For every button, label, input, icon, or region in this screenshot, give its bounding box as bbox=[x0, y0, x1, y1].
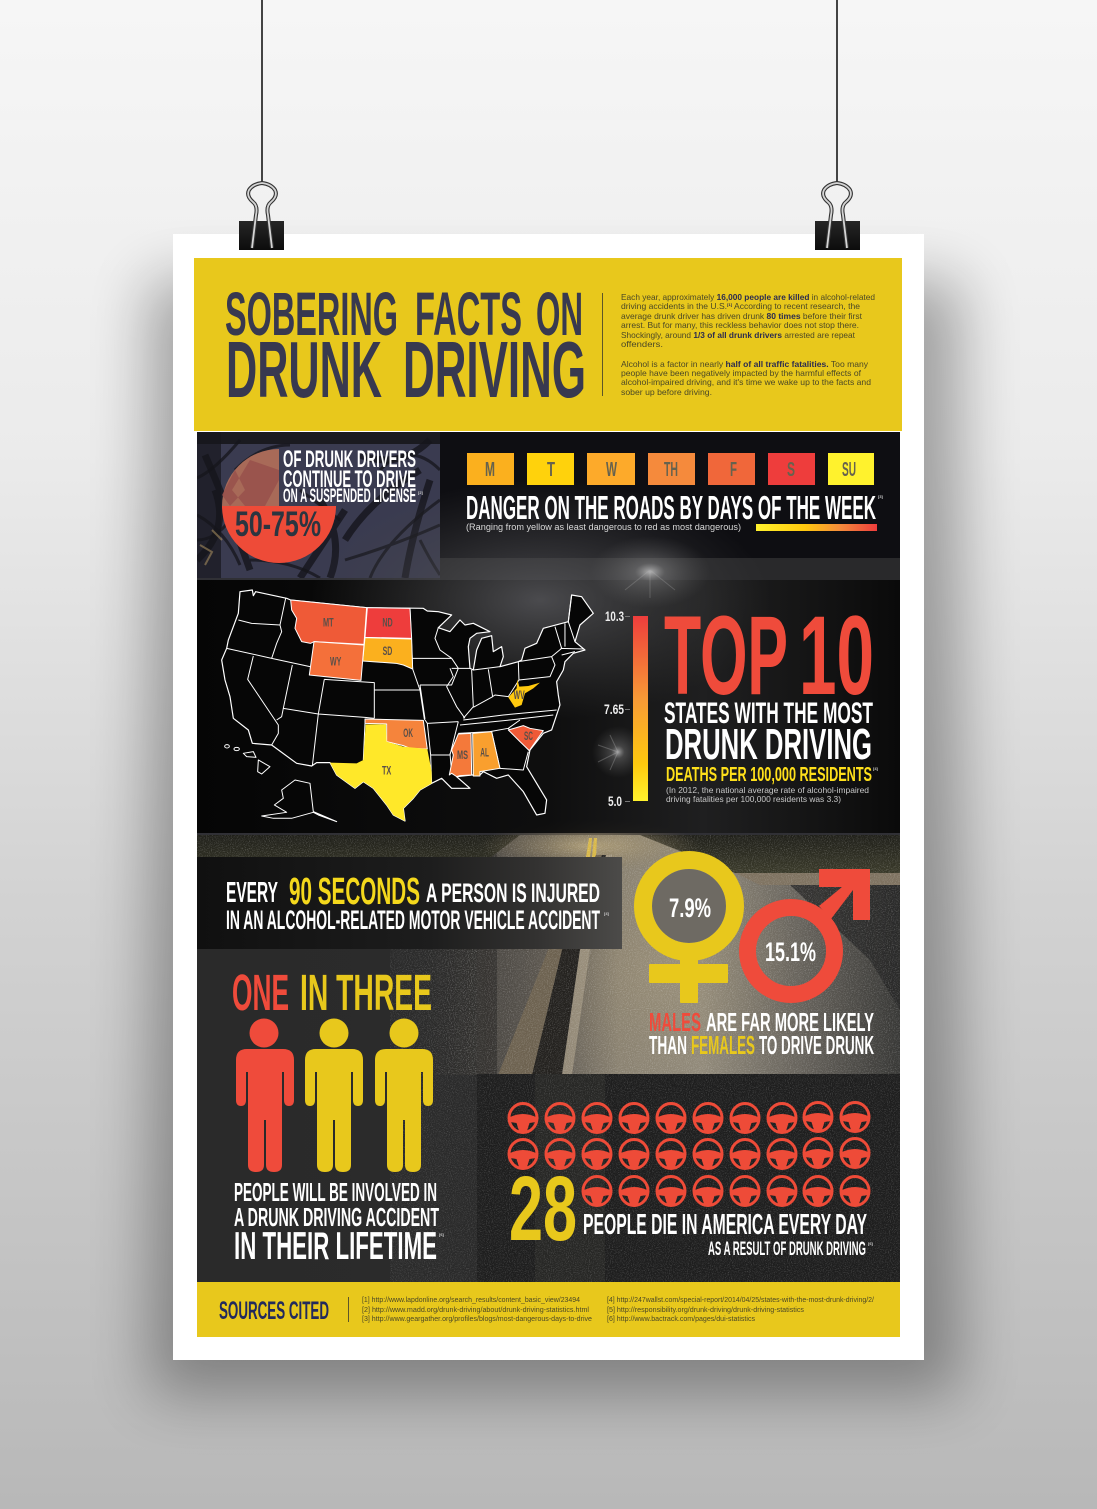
heading: one in three: IN THREE bbox=[300, 964, 432, 1021]
hanging strings bbox=[262, 0, 837, 184]
intro text: According to recent research, the bbox=[732, 301, 860, 311]
suspended license text: OF DRUNK DRIVERS bbox=[283, 446, 416, 473]
day letters: M bbox=[485, 459, 495, 481]
panel: every 90 seconds: A PERSON IS INJURED bbox=[426, 878, 600, 908]
sources list: [5] http://responsibility.org/drunk-driving/drunk-driving-statistics bbox=[607, 1307, 804, 1314]
panel: one in three bbox=[197, 949, 477, 1282]
state labels: WY bbox=[330, 656, 341, 669]
footer: sources bbox=[197, 1282, 900, 1337]
state: OK bbox=[365, 719, 427, 749]
icon: left binder clip bbox=[239, 183, 284, 250]
intro text: arrest. But for many, this reckless behavior does not stop there. bbox=[621, 320, 859, 330]
suspended license text: CONTINUE TO DRIVE bbox=[283, 466, 416, 493]
national average note bbox=[666, 785, 869, 804]
state: MT bbox=[291, 600, 367, 644]
map panel fog bbox=[310, 480, 770, 720]
day letters: SU bbox=[842, 459, 856, 481]
heading: top 10: 10 bbox=[799, 593, 874, 718]
heading: drunk driving: DRUNK DRIVING bbox=[665, 720, 872, 769]
pie value: 50-75% bbox=[235, 505, 321, 544]
sources list: [3] http://www.geargather.org/profiles/blogs/most-dangerous-days-to-drive bbox=[362, 1316, 592, 1323]
sources list: [2] http://www.madd.org/drunk-driving/about/drunk-driving-statistics.html bbox=[362, 1307, 589, 1314]
suspended license text: ON A SUSPENDED LICENSE bbox=[283, 486, 416, 507]
state: WV bbox=[508, 679, 540, 708]
heading: states with the most: STATES WITH THE MOST bbox=[664, 697, 873, 730]
state: SC bbox=[508, 726, 543, 751]
state: ND bbox=[365, 608, 412, 638]
state labels: AL bbox=[480, 747, 489, 760]
intro text: sober up before driving. bbox=[621, 387, 712, 397]
one in three caption: IN THEIR LIFETIME bbox=[234, 1225, 437, 1268]
day letters bbox=[485, 459, 856, 481]
state labels: SC bbox=[524, 730, 533, 743]
state labels: ND bbox=[382, 617, 393, 630]
day letters: T bbox=[547, 459, 555, 481]
day letters: F bbox=[730, 459, 737, 481]
danger gradient bar bbox=[756, 524, 877, 531]
caption: result of drunk driving bbox=[708, 1239, 874, 1260]
panel: 28 people die bbox=[477, 1074, 900, 1282]
scale legend: 7.65 bbox=[604, 701, 624, 717]
panel: every 90 seconds: IN AN ALCOHOL-RELATED MOTOR VEHICLE ACCIDENT bbox=[226, 905, 600, 935]
state: MS bbox=[449, 733, 472, 777]
heading: danger on the roads: [3] bbox=[878, 494, 884, 499]
intro text: average drunk driver has driven drunk 80 times before their first bbox=[621, 311, 863, 321]
headlight glow middle bbox=[592, 726, 644, 778]
state: Alaska bbox=[262, 780, 337, 822]
intro text: alcohol-impaired driving, and it's time we wake up to the facts and bbox=[621, 377, 871, 387]
males vs females text: FEMALES bbox=[691, 1030, 755, 1060]
sources list bbox=[362, 1297, 874, 1323]
female value: 7.9% bbox=[669, 893, 711, 923]
danger subtext: (Ranging from yellow as least dangerous to red as most dangerous) bbox=[466, 522, 741, 532]
males vs females text bbox=[649, 1007, 874, 1060]
intro text: people have been negatively impacted by the harmful effects of bbox=[621, 368, 862, 378]
panel: every 90 seconds: EVERY bbox=[226, 877, 278, 909]
icon: right binder clip bbox=[815, 183, 860, 250]
state labels: OK bbox=[403, 727, 413, 740]
sources heading: SOURCES CITED bbox=[219, 1297, 329, 1325]
title bbox=[225, 280, 586, 414]
title: DRIVING bbox=[403, 325, 586, 414]
intro text: driving accidents in the U.S. bbox=[621, 301, 724, 311]
panel: every 90 seconds: 90 SECONDS bbox=[289, 871, 420, 913]
lower 48 outline bbox=[222, 590, 593, 821]
state labels: SD bbox=[383, 645, 392, 658]
strip behind glow bbox=[440, 558, 900, 580]
photo background: night road bbox=[197, 432, 900, 1282]
heading: deaths per 100,000: DEATHS PER 100,000 RESIDENTS bbox=[666, 764, 872, 786]
national average note: (In 2012, the national average rate of alcohol-impaired bbox=[666, 785, 869, 795]
scale legend bbox=[604, 608, 648, 809]
heading: one in three: ONE bbox=[232, 964, 289, 1021]
intro text: offenders. bbox=[621, 339, 663, 349]
heading: deaths per 100,000: [4] bbox=[873, 766, 879, 771]
state: WY bbox=[309, 642, 364, 680]
heading: deaths per 100,000 bbox=[666, 764, 879, 786]
sources list: [1] http://www.lapdonline.org/search_results/content_basic_view/23494 bbox=[362, 1297, 580, 1304]
pie chart: 50-75% bbox=[222, 449, 336, 563]
suspended license text bbox=[283, 446, 424, 507]
heading: danger on the roads bbox=[466, 489, 884, 526]
panel: map background bbox=[197, 580, 900, 833]
state: Hawaii bbox=[225, 745, 270, 774]
state labels: MS bbox=[457, 749, 468, 762]
caption: people die: PEOPLE DIE IN AMERICA EVERY DAY bbox=[583, 1209, 867, 1241]
poster sheet bbox=[173, 234, 924, 1360]
title: DRUNK bbox=[226, 325, 382, 414]
intro text: Alcohol is a factor in nearly half of all traffic fatalities. Too many bbox=[621, 359, 869, 369]
males vs females text: TO DRIVE DRUNK bbox=[759, 1030, 874, 1060]
intro text: [1] bbox=[727, 302, 733, 307]
suspended license text: [2] bbox=[418, 490, 424, 495]
title: FACTS bbox=[415, 280, 522, 348]
one in three caption bbox=[234, 1177, 445, 1268]
poster shadow bbox=[150, 280, 960, 1395]
males vs females text: ARE FAR MORE LIKELY bbox=[706, 1007, 874, 1037]
intro text bbox=[621, 292, 875, 397]
day letters: S bbox=[787, 459, 795, 481]
male value: 15.1% bbox=[765, 937, 816, 967]
state lines bbox=[227, 595, 583, 783]
one in three caption: [6] bbox=[439, 1232, 445, 1237]
one in three caption: A DRUNK DRIVING ACCIDENT bbox=[234, 1202, 439, 1232]
state labels: MT bbox=[323, 617, 334, 630]
panel: every 90 seconds: [4] bbox=[604, 911, 610, 916]
state: TX bbox=[330, 724, 432, 821]
national average note: driving fatalities per 100,000 residents was 3.3) bbox=[666, 794, 841, 804]
icons: three people bbox=[236, 1018, 433, 1172]
heading: one in three bbox=[232, 964, 432, 1021]
state: SD bbox=[363, 638, 413, 669]
panel: days of the week background bbox=[440, 432, 900, 558]
icon: male symbol bbox=[748, 869, 870, 994]
title: SOBERING bbox=[225, 280, 398, 348]
scale legend: 5.0 bbox=[608, 793, 622, 809]
state: AL bbox=[473, 732, 500, 776]
intro text: Each year, approximately 16,000 people are killed in alcohol-related bbox=[621, 292, 875, 302]
males vs females text: THAN bbox=[649, 1030, 687, 1060]
state labels: WV bbox=[514, 689, 525, 702]
state labels bbox=[323, 617, 533, 777]
heading: top 10: TOP bbox=[664, 593, 788, 718]
caption: result of drunk driving: AS A RESULT OF DRUNK DRIVING bbox=[708, 1239, 866, 1260]
scale legend: 10.3 bbox=[605, 608, 624, 624]
panel: suspended license background bbox=[197, 432, 440, 578]
males vs females text: MALES bbox=[649, 1007, 701, 1037]
icon: female symbol bbox=[643, 860, 735, 1003]
icons: steering wheels bbox=[509, 1102, 869, 1206]
one in three caption: PEOPLE WILL BE INVOLVED IN bbox=[234, 1177, 437, 1207]
sources list: [6] http://www.bactrack.com/pages/dui-statistics bbox=[607, 1316, 755, 1323]
header panel bbox=[194, 258, 902, 431]
caption: result of drunk driving: [6] bbox=[868, 1241, 874, 1246]
sources list: [4] http://247wallst.com/special-report/2014/04/25/states-with-the-most-drunk-driving/2/ bbox=[607, 1297, 874, 1304]
number: 28: 28 bbox=[509, 1158, 577, 1260]
day boxes bbox=[467, 453, 874, 485]
day letters: W bbox=[606, 459, 617, 481]
intro text: Shockingly, around 1/3 of all drunk drivers arrested are repeat bbox=[621, 330, 856, 340]
title: ON bbox=[536, 280, 583, 348]
day letters: TH bbox=[664, 459, 678, 481]
state labels: TX bbox=[382, 764, 391, 777]
headlight glow top bbox=[590, 536, 710, 608]
panel: every 90 seconds bbox=[197, 857, 622, 949]
map of the USA bbox=[222, 590, 593, 822]
